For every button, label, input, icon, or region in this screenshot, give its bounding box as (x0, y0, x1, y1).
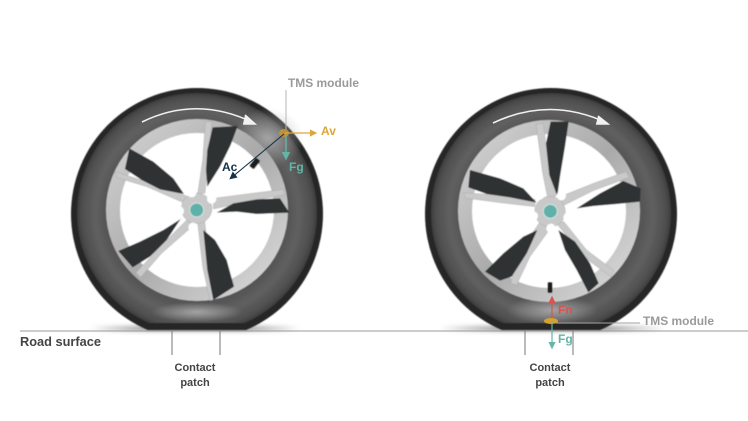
Fg label: right: Fg (558, 332, 573, 346)
tyre: left wheel (71, 88, 323, 340)
hub cap: right wheel (543, 204, 557, 218)
valve: left wheel (249, 157, 260, 170)
rim: right wheel (465, 127, 633, 295)
left TMS module marker (279, 129, 289, 137)
Fn label: Fn (558, 303, 573, 317)
right TMS module marker (544, 318, 558, 324)
rotation arrow: right wheel (493, 110, 608, 124)
lug holes: right wheel (529, 190, 573, 233)
silver spokes: left wheel (115, 122, 285, 301)
right wheel (425, 88, 677, 340)
Ac arrow (231, 134, 284, 178)
Av label: Av (321, 124, 336, 138)
road surface label: Road surface (20, 334, 101, 349)
carbon blades: right wheel (468, 122, 641, 292)
silver spokes: right wheel (464, 123, 629, 285)
contact patch label: left: Contact (175, 362, 216, 374)
right TMS module label: TMS module (643, 314, 714, 328)
valve: right wheel (548, 282, 552, 293)
rim: left wheel (113, 126, 281, 294)
carbon blades: left wheel (118, 126, 289, 300)
Fg arrow: left (285, 135, 287, 159)
left TMS module label: TMS module (288, 76, 359, 90)
contact patch brackets: right (525, 331, 573, 355)
Ac label: Ac (222, 160, 238, 174)
left wheel (71, 88, 323, 340)
contact patch label: left: patch (180, 377, 210, 389)
road surface line (20, 326, 748, 331)
rotation arrow: left wheel (142, 109, 255, 124)
Fn arrow (551, 297, 553, 320)
contact patch brackets: left (172, 331, 220, 355)
hub cap: left wheel (190, 203, 204, 217)
Fg label: left: Fg (289, 160, 304, 174)
Av arrow (285, 132, 316, 134)
Fg arrow: right (551, 322, 553, 348)
left TMS module leader line (285, 90, 287, 130)
contact patch label: right: Contact (530, 362, 571, 374)
lug holes: left wheel (175, 188, 218, 232)
contact patch label: right: patch (535, 377, 565, 389)
right TMS module leader line (556, 322, 640, 324)
tyre: right wheel (425, 88, 677, 340)
